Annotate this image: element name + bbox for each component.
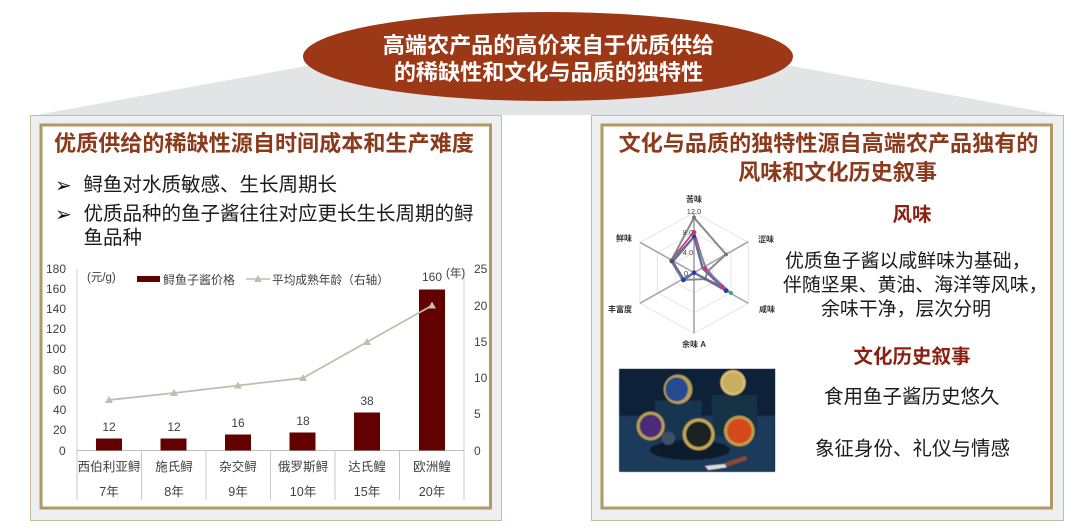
left axis labels: 20 xyxy=(53,423,67,437)
radar chart: flavour profile: 12.0 xyxy=(687,207,701,216)
bar value labels: 38 xyxy=(360,394,374,408)
radar chart: flavour profile: 苦味 xyxy=(686,194,702,204)
radar chart: flavour profile: 涩味 xyxy=(758,234,774,244)
radar chart: flavour profile: 鲜味 xyxy=(616,233,632,243)
bar value labels: 160 xyxy=(422,270,442,284)
category table: 15年 xyxy=(354,485,380,499)
left axis labels: 160 xyxy=(46,282,66,296)
right axis labels: 0 xyxy=(474,444,481,458)
category table: 施氏鲟 xyxy=(155,460,193,474)
combo chart: caviar price and maturity age xyxy=(46,262,488,500)
left axis labels: 60 xyxy=(53,383,67,397)
left axis labels: 140 xyxy=(46,302,66,316)
category table: 西伯利亚鲟 xyxy=(78,460,141,474)
bullet list: 优质品种的鱼子酱往往对应更长生长周期的鲟 xyxy=(84,203,474,225)
category table: 10年 xyxy=(290,485,316,499)
radar chart: flavour profile: 丰富度 xyxy=(608,304,632,314)
text: history: 食用鱼子酱历史悠久 xyxy=(824,386,1000,408)
text: symbolism: 象征身份、礼仪与情感 xyxy=(815,438,1010,460)
bar value labels: 16 xyxy=(231,416,245,430)
bar value labels: 12 xyxy=(167,420,181,434)
legend xyxy=(137,272,389,287)
text block: flavour description: 优质鱼子酱以咸鲜味为基础， xyxy=(785,250,1031,272)
panel: supply scarcity xyxy=(30,116,502,520)
heading: culture and quality: 文化与品质的独特性源自高端农产品独有的 xyxy=(619,131,1038,156)
subheading: culture and history: 文化历史叙事 xyxy=(853,345,971,368)
radar chart: flavour profile: 余味 A xyxy=(682,339,706,349)
category table xyxy=(77,450,464,500)
heading: culture and quality: 风味和文化历史叙事 xyxy=(738,160,937,185)
heading: supply scarcity: 优质供给的稀缺性源自时间成本和生产难度 xyxy=(54,131,474,156)
radar chart: flavour profile: 0 xyxy=(684,269,688,278)
legend: 鲟鱼子酱价格 xyxy=(163,272,235,287)
left axis labels: 180 xyxy=(46,262,66,276)
subheading: flavour: 风味 xyxy=(892,204,932,226)
bar value labels: 12 xyxy=(102,420,116,434)
left axis labels: 40 xyxy=(53,403,67,417)
left axis labels: 80 xyxy=(53,363,67,377)
left axis labels xyxy=(46,262,116,458)
bars xyxy=(96,290,445,450)
left axis labels: 0 xyxy=(59,444,66,458)
line series: maturity age xyxy=(105,302,436,403)
left axis labels: 120 xyxy=(46,322,66,336)
title oval: 高端农产品的高价来自于优质供给 xyxy=(383,33,714,58)
legend: 平均成熟年龄（右轴） xyxy=(272,273,389,287)
text block: flavour description: 余味干净，层次分明 xyxy=(821,298,991,320)
text block: flavour description xyxy=(783,250,1047,320)
category table: 7年 xyxy=(99,485,119,499)
bullet list: 鱼品种 xyxy=(84,227,142,249)
right axis labels: 10 xyxy=(474,371,488,385)
left axis labels: (元/g) xyxy=(87,272,116,284)
heading: culture and quality xyxy=(619,131,1038,185)
title oval xyxy=(303,12,793,101)
radar chart: flavour profile xyxy=(608,194,775,349)
right axis labels: 25 xyxy=(474,262,488,276)
connector: grey funnel from oval to panels xyxy=(36,65,1060,115)
right axis labels xyxy=(446,262,488,458)
radar chart: flavour profile: 4.0 xyxy=(683,248,693,257)
panel: culture and quality xyxy=(592,116,1064,520)
bullet list: 鲟鱼对水质敏感、生长周期长 xyxy=(84,174,337,196)
category table: 20年 xyxy=(419,485,445,499)
right axis labels: 15 xyxy=(474,335,488,349)
category table: 杂交鲟 xyxy=(219,459,257,474)
text block: flavour description: 伴随坚果、黄油、海洋等风味， xyxy=(783,274,1047,296)
category table: 8年 xyxy=(164,485,184,499)
category table: 俄罗斯鲟 xyxy=(278,460,329,474)
bar value labels xyxy=(102,270,442,434)
left axis labels: 100 xyxy=(46,342,66,356)
right axis labels: 20 xyxy=(474,299,488,313)
bullet list: ➢ xyxy=(55,204,72,226)
title oval: 的稀缺性和文化与品质的独特性 xyxy=(394,60,703,85)
radar chart: flavour profile: 8.0 xyxy=(683,228,693,237)
radar chart: flavour profile: 咸味 xyxy=(759,304,775,314)
bar value labels: 18 xyxy=(296,414,310,428)
image: caviar tins on dark blue xyxy=(619,369,775,472)
right axis labels: 5 xyxy=(474,407,481,421)
bullet list xyxy=(55,174,474,249)
right axis labels: (年) xyxy=(446,266,465,280)
category table: 9年 xyxy=(228,485,248,499)
category table: 欧洲鳇 xyxy=(413,460,451,474)
category table: 达氏鳇 xyxy=(348,460,386,474)
bullet list: ➢ xyxy=(55,175,72,197)
